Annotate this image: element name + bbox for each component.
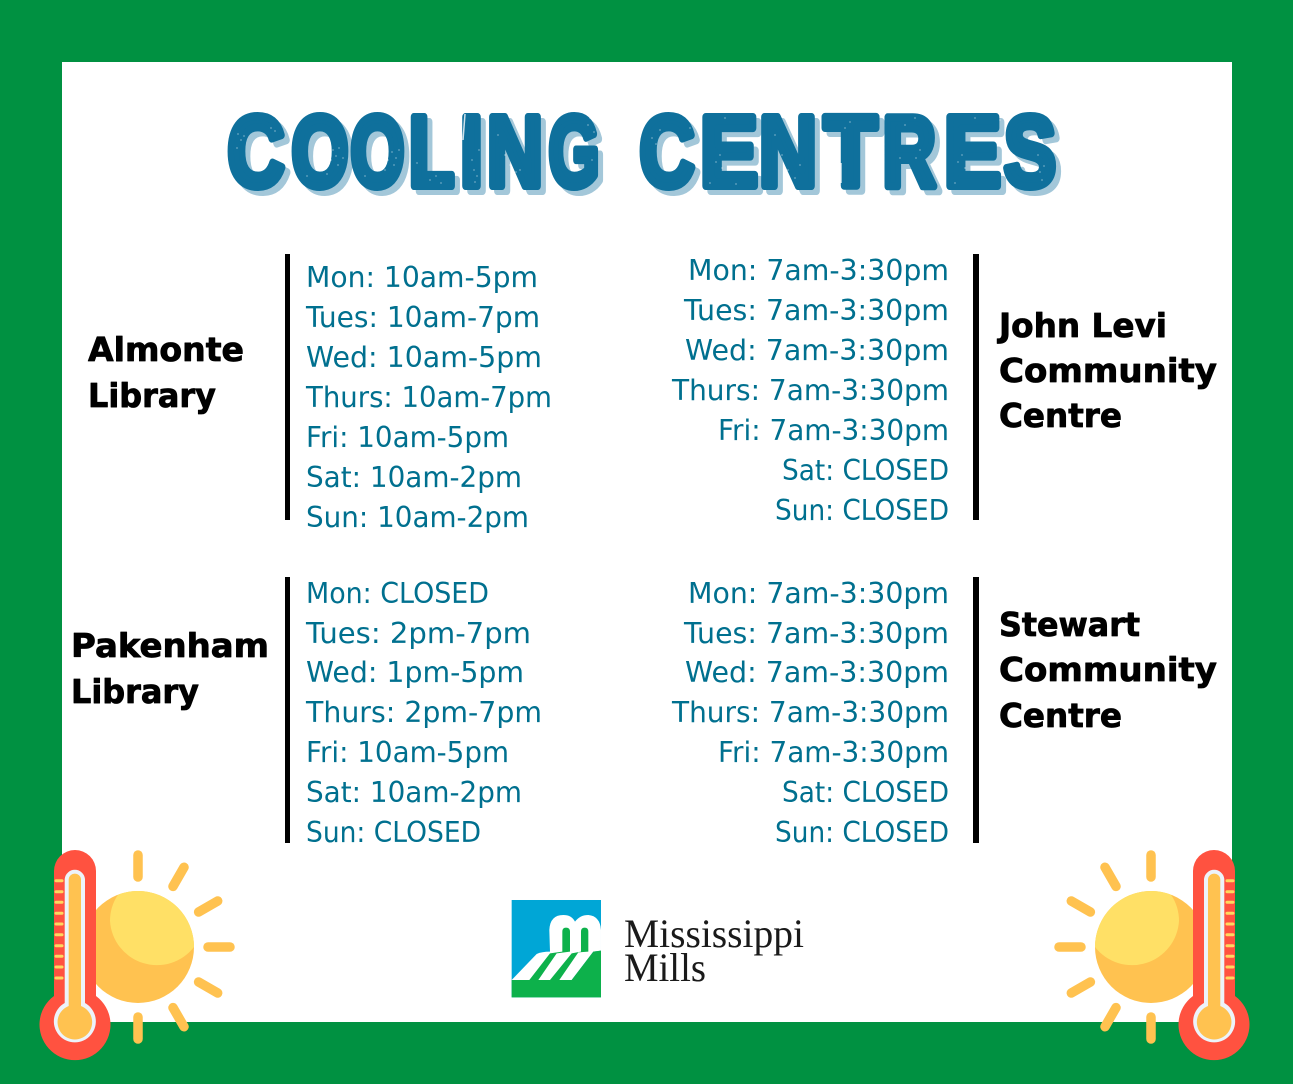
logo: Mississippi Mills wordmark — [624, 911, 804, 990]
location label: Pakenham Library: Library — [71, 672, 199, 711]
divider bar: Stewart — [973, 577, 979, 843]
title: Cooling Centres: S — [1004, 96, 1056, 208]
hours: John Levi Community Centre: Sun: CLOSED — [775, 494, 949, 527]
hours: Stewart Community Centre: Tues: 7am-3:30pm — [683, 617, 949, 650]
hours: Stewart Community Centre: Wed: 7am-3:30pm — [685, 656, 949, 689]
hours: Pakenham Library: Wed: 1pm-5pm — [306, 656, 524, 689]
divider bar: Almonte — [285, 254, 290, 520]
title: Cooling Centres: L — [409, 96, 454, 208]
title: Cooling Centres: N — [759, 96, 817, 208]
hours: Almonte Library: Sun: 10am-2pm — [306, 501, 529, 534]
divider bar: John Levi — [973, 254, 979, 520]
hours: Stewart Community Centre: Sat: CLOSED — [782, 776, 949, 809]
hours: John Levi Community Centre: Fri: 7am-3:30pm — [718, 414, 949, 447]
location label: John Levi Community Centre: Community — [999, 351, 1217, 390]
title: Cooling Centres: T — [829, 101, 882, 213]
title: Cooling Centres: G — [554, 101, 604, 213]
icon: left sun and thermometer — [40, 850, 230, 1060]
hours: Almonte Library — [305, 261, 552, 534]
title: Cooling Centres: R — [882, 96, 936, 208]
hours: Pakenham Library: Sat: 10am-2pm — [306, 776, 522, 809]
hours: Pakenham Library: Mon: CLOSED — [306, 577, 489, 610]
location label: Stewart Community Centre: Centre — [999, 696, 1122, 735]
title: Cooling Centres: E — [949, 101, 1006, 213]
logo: Mississippi Mills wordmark: Mills — [624, 945, 706, 990]
hours: Almonte Library: Sat: 10am-2pm — [306, 461, 522, 494]
hours: Stewart Community Centre: Thurs: 7am-3:30pm — [671, 696, 949, 729]
title: Cooling Centres: I — [460, 96, 483, 208]
hours: Almonte Library: Thurs: 10am-7pm — [305, 381, 552, 414]
title: Cooling Centres: E — [700, 96, 758, 208]
title: Cooling Centres: N — [487, 96, 543, 208]
location label: Pakenham Library: Pakenham — [71, 626, 269, 665]
hours: John Levi Community Centre — [671, 254, 949, 527]
hours: Almonte Library: Mon: 10am-5pm — [306, 261, 538, 294]
title: Cooling Centres: G — [548, 96, 600, 208]
location label: John Levi Community Centre: Centre — [999, 396, 1122, 435]
hours: John Levi Community Centre: Sat: CLOSED — [782, 454, 949, 487]
title: Cooling Centres: O — [296, 101, 354, 213]
hours: John Levi Community Centre: Wed: 7am-3:30pm — [685, 334, 949, 367]
hours: Stewart Community Centre: Mon: 7am-3:30pm — [688, 577, 949, 610]
location label: John Levi Community Centre — [997, 306, 1217, 435]
location label: Stewart Community Centre — [999, 605, 1217, 735]
divider bar: Pakenham — [285, 577, 290, 843]
hours: Almonte Library: Wed: 10am-5pm — [306, 341, 542, 374]
location label: Stewart Community Centre: Stewart — [999, 605, 1140, 644]
title: Cooling Centres: S — [1009, 101, 1061, 213]
title: Cooling Centres: I — [465, 101, 488, 213]
title: Cooling Centres: C — [228, 96, 284, 208]
location label: Almonte Library — [88, 330, 244, 415]
title: Cooling Centres: O — [292, 96, 348, 208]
title: Cooling Centres — [228, 96, 1061, 213]
hours: Pakenham Library: Tues: 2pm-7pm — [305, 617, 531, 650]
hours: Almonte Library: Tues: 10am-7pm — [305, 301, 540, 334]
hours: John Levi Community Centre: Thurs: 7am-3:30pm — [671, 374, 949, 407]
location label: Almonte Library: Almonte — [88, 330, 244, 369]
location label: Almonte Library: Library — [88, 376, 216, 415]
hours: Stewart Community Centre: Sun: CLOSED — [775, 816, 949, 849]
title: Cooling Centres: T — [824, 96, 877, 208]
hours: Pakenham Library: Sun: CLOSED — [306, 816, 481, 849]
hours: Stewart Community Centre: Fri: 7am-3:30pm — [718, 736, 949, 769]
title: Cooling Centres: N — [492, 101, 548, 213]
title: Cooling Centres: C — [640, 96, 694, 208]
hours: John Levi Community Centre: Mon: 7am-3:30pm — [688, 254, 949, 287]
logo: Mississippi Mills mark — [512, 900, 601, 997]
location label: John Levi Community Centre: John Levi — [997, 306, 1167, 345]
location label: Stewart Community Centre: Community — [999, 650, 1217, 689]
title: Cooling Centres: E — [944, 96, 1001, 208]
hours: Pakenham Library: Thurs: 2pm-7pm — [305, 696, 542, 729]
title: Cooling Centres: C — [644, 101, 700, 213]
title: Cooling Centres: L — [414, 101, 459, 213]
logo: Mississippi Mills wordmark: Mississippi — [624, 911, 804, 956]
hours: John Levi Community Centre: Tues: 7am-3:30pm — [683, 294, 949, 327]
hours: Pakenham Library — [305, 577, 542, 849]
title: Cooling Centres: R — [888, 101, 941, 213]
location label: Pakenham Library — [71, 626, 269, 711]
title: Cooling Centres: E — [705, 101, 763, 213]
title: Cooling Centres: O — [350, 96, 404, 208]
title: Cooling Centres: N — [764, 101, 822, 213]
hours: Pakenham Library: Fri: 10am-5pm — [306, 736, 509, 769]
hours: Almonte Library: Fri: 10am-5pm — [306, 421, 509, 454]
hours: Stewart Community Centre — [671, 577, 949, 849]
title: Cooling Centres: O — [356, 101, 410, 213]
title: Cooling Centres: C — [232, 101, 290, 213]
icon: right sun and thermometer — [1059, 850, 1250, 1060]
